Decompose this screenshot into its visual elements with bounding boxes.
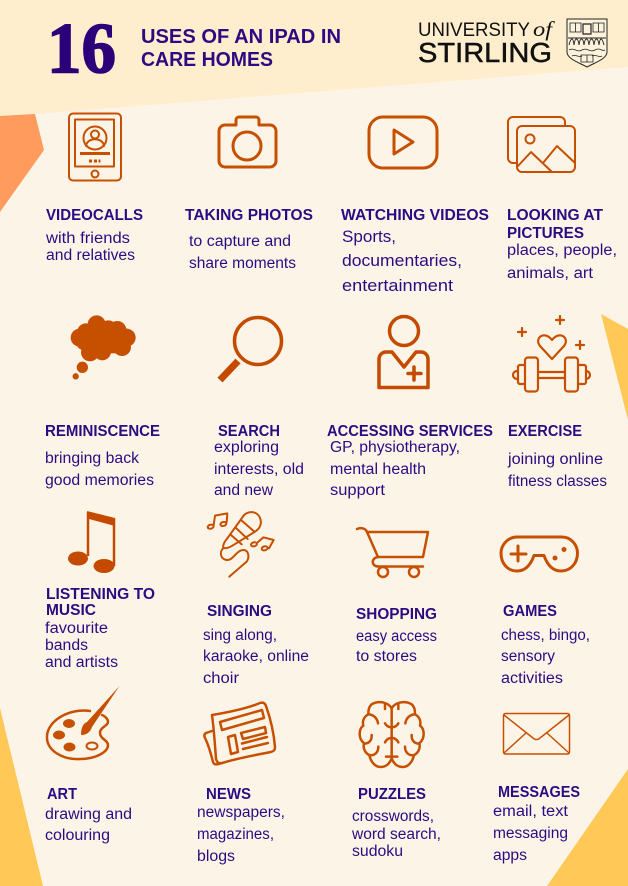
- item: videocalls: [45, 114, 143, 264]
- icon: microphone and notes: [207, 512, 274, 577]
- heading: ART: [47, 786, 77, 803]
- description: blogs: [197, 848, 235, 865]
- description: interests, old: [214, 461, 304, 478]
- heading: [46, 586, 155, 619]
- description: apps: [493, 847, 527, 864]
- logo: University of Stirling: [418, 17, 607, 68]
- description: and new: [214, 482, 274, 499]
- description: magazines,: [197, 826, 274, 843]
- heading: TAKING PHOTOS: [185, 207, 313, 224]
- title: CARE HOMES: [141, 49, 273, 71]
- decorative shape: yellow bottom left: [0, 708, 43, 886]
- item: looking at pictures: [507, 117, 617, 282]
- description: favourite: [45, 620, 108, 637]
- icon: newspaper: [204, 703, 275, 764]
- description: drawing and: [45, 806, 132, 823]
- description: [45, 620, 118, 671]
- item: puzzles: [351, 702, 441, 860]
- description: fitness classes: [508, 473, 607, 490]
- item: games: [501, 537, 590, 687]
- description: [214, 439, 304, 499]
- icon: thought cloud: [71, 315, 136, 379]
- heading: ACCESSING SERVICES: [327, 423, 493, 440]
- icon: tablet with contact: [69, 114, 121, 180]
- description: good memories: [45, 472, 154, 489]
- title: [47, 8, 341, 88]
- description: mental health: [330, 461, 426, 478]
- description: and artists: [45, 654, 118, 671]
- description: animals, art: [507, 265, 594, 282]
- heading: MUSIC: [46, 602, 96, 619]
- decorative shape: yellow right: [601, 314, 628, 420]
- item: news: [197, 703, 285, 865]
- description: sing along,: [203, 627, 277, 644]
- decorative shape: yellow bottom right: [547, 769, 628, 886]
- title: 16: [47, 8, 116, 88]
- description: easy access: [356, 628, 437, 645]
- heading: VIDEOCALLS: [46, 207, 143, 224]
- description: [507, 451, 607, 490]
- icon: palette and brush: [47, 686, 120, 759]
- description: [493, 803, 569, 864]
- description: email, text: [493, 803, 569, 820]
- description: with friends: [45, 230, 130, 247]
- description: [356, 628, 437, 665]
- description: chess, bingo,: [501, 627, 590, 644]
- description: karaoke, online: [203, 648, 309, 665]
- logo: University of Stirling: of: [533, 17, 556, 41]
- heading: NEWS: [206, 786, 251, 803]
- description: bands: [45, 637, 88, 654]
- item: listening to music: [45, 511, 155, 671]
- description: to capture and: [189, 233, 291, 250]
- description: [330, 439, 460, 499]
- description: messaging: [493, 825, 568, 842]
- description: [45, 806, 132, 844]
- item: accessing services: [327, 316, 493, 499]
- description: [351, 808, 441, 860]
- item: shopping: [356, 528, 437, 665]
- icon: dumbbell and heart: [513, 316, 590, 392]
- description: exploring: [214, 439, 279, 456]
- icon: envelope: [504, 714, 570, 754]
- icon: game controller: [501, 537, 578, 571]
- item: watching videos: [341, 117, 489, 295]
- decorative shape: orange top left: [0, 114, 44, 212]
- description: to stores: [356, 648, 417, 665]
- description: colouring: [45, 827, 110, 844]
- item: messages: [493, 714, 580, 864]
- heading: [507, 207, 604, 242]
- heading: GAMES: [503, 603, 557, 620]
- item: exercise: [507, 316, 607, 490]
- description: [45, 450, 154, 489]
- description: sudoku: [352, 843, 403, 860]
- description: support: [330, 482, 386, 499]
- icon: play button: [369, 117, 437, 168]
- description: [501, 627, 590, 687]
- icon: brain: [360, 702, 424, 767]
- description: bringing back: [45, 450, 139, 467]
- heading: MESSAGES: [498, 784, 580, 801]
- logo: University of Stirling: STIRLING: [418, 37, 552, 68]
- heading: SINGING: [207, 603, 272, 620]
- icon: magnifying glass: [220, 318, 282, 380]
- logo: University of Stirling: UNIVERSITY: [418, 20, 530, 41]
- icon: pictures: [508, 117, 575, 172]
- title: USES OF AN IPAD IN: [141, 26, 341, 48]
- item: singing: [203, 512, 309, 687]
- description: sensory: [501, 648, 555, 665]
- description: [45, 230, 135, 264]
- description: [189, 233, 296, 272]
- description: newspapers,: [197, 804, 285, 821]
- heading: SEARCH: [218, 423, 280, 440]
- description: Sports,: [342, 227, 396, 246]
- description: activities: [501, 670, 563, 687]
- item: search: [214, 318, 304, 499]
- description: joining online: [507, 451, 603, 468]
- description: entertainment: [342, 276, 453, 295]
- heading: PUZZLES: [358, 786, 426, 803]
- description: [507, 242, 617, 282]
- description: places, people,: [507, 242, 617, 259]
- heading: REMINISCENCE: [45, 423, 160, 440]
- heading: PICTURES: [507, 225, 584, 242]
- heading: WATCHING VIDEOS: [341, 207, 489, 224]
- description: word search,: [351, 826, 441, 843]
- item: reminiscence: [45, 315, 160, 489]
- description: choir: [203, 670, 239, 687]
- heading: LISTENING TO: [46, 586, 155, 603]
- description: and relatives: [46, 247, 135, 264]
- description: share moments: [189, 255, 296, 272]
- description: crosswords,: [352, 808, 434, 825]
- description: [342, 227, 462, 295]
- item: taking photos: [185, 117, 313, 272]
- heading: EXERCISE: [508, 423, 582, 440]
- icon: camera: [219, 117, 276, 167]
- description: documentaries,: [342, 251, 462, 270]
- heading: LOOKING AT: [507, 207, 604, 224]
- heading: SHOPPING: [356, 606, 437, 623]
- icon: shopping cart: [357, 528, 428, 577]
- description: [197, 804, 285, 865]
- description: [203, 627, 309, 687]
- icon: music notes: [68, 511, 115, 573]
- description: GP, physiotherapy,: [330, 439, 460, 456]
- icon: medical professional: [379, 316, 428, 388]
- item: art: [45, 686, 132, 844]
